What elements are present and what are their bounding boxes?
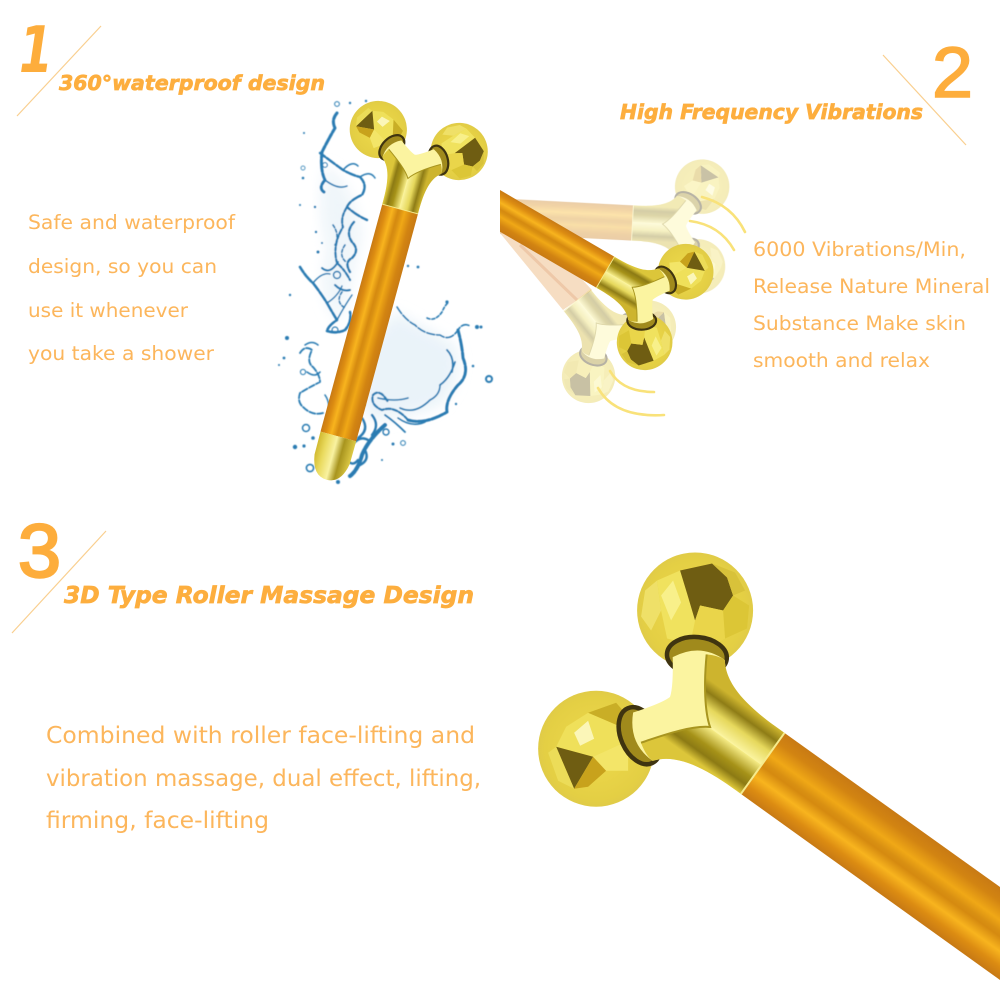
feature 2 number: 2 xyxy=(932,34,973,113)
feature 3 heading: 3D Type Roller Massage Design xyxy=(64,583,474,609)
feature 2 description xyxy=(753,238,990,372)
large roller close-up xyxy=(483,498,1000,980)
feature 1 description xyxy=(28,211,236,365)
feature 2 description: smooth and relax xyxy=(753,349,930,372)
large roller shaft xyxy=(742,734,1000,980)
feature 3 description: vibration massage, dual effect, lifting, xyxy=(46,766,481,792)
feature 2 diagonal rule xyxy=(883,55,966,145)
vibration arcs xyxy=(598,197,745,415)
water splash xyxy=(278,100,492,484)
feature 1 description: Safe and waterproof xyxy=(28,211,236,234)
feature 3 number: 3 xyxy=(18,509,61,593)
feature 1 diagonal rule xyxy=(17,26,101,116)
ghost roller lower xyxy=(562,289,676,404)
feature 1 description: you take a shower xyxy=(28,342,215,365)
feature 1 description: design, so you can xyxy=(28,255,217,278)
feature 3 diagonal rule xyxy=(12,531,106,633)
large roller head xyxy=(483,498,860,899)
feature 2 description: Release Nature Mineral xyxy=(753,275,990,298)
ghost roller upper xyxy=(500,159,730,294)
feature 3 description xyxy=(46,723,481,834)
feature 3 description: firming, face-lifting xyxy=(46,808,269,834)
vibrating roller xyxy=(440,131,742,429)
ghost roller lower shaft xyxy=(500,233,592,310)
main roller xyxy=(440,131,739,395)
feature 3 description: Combined with roller face-lifting and xyxy=(46,723,475,749)
feature 2 description: Substance Make skin xyxy=(753,312,966,335)
feature 1 description: use it whenever xyxy=(28,299,189,322)
feature 2 heading: High Frequency Vibrations xyxy=(620,100,923,124)
roller 1 with water xyxy=(248,81,508,501)
feature 2 description: 6000 Vibrations/Min, xyxy=(753,238,966,261)
feature 1 number: 1 xyxy=(19,14,53,88)
feature 1 heading: 360°waterproof design xyxy=(59,71,325,95)
